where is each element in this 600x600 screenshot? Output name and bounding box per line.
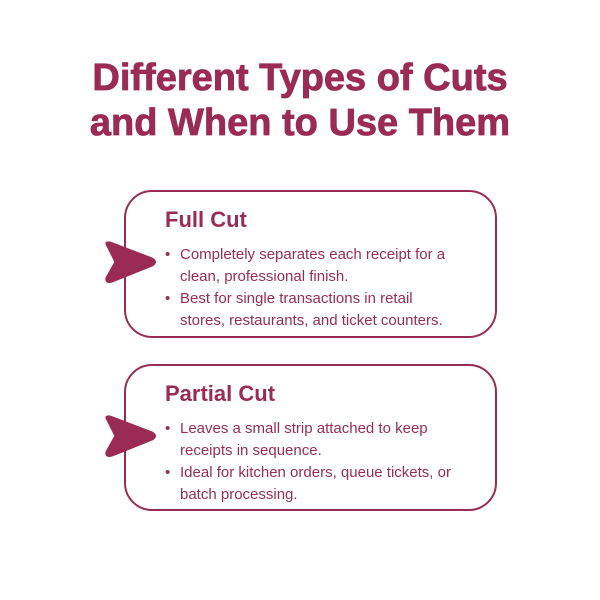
title: Different Types of Cuts [92,57,508,99]
bullet list: partial cut: Leaves a small strip attached to keep receipts in sequence. [180,420,428,459]
heading: partial cut: Partial Cut [165,381,275,406]
icon: arrow partial cut [105,415,156,457]
bullet list: partial cut: Ideal for kitchen orders, queue tickets, or batch processing. [180,464,451,503]
bullet list: full cut [166,246,446,329]
panel: full cut [124,190,497,338]
panel: partial cut [124,364,497,511]
icon: arrow full cut [105,241,156,283]
bullet list: partial cut [166,420,451,503]
bullet list: full cut: Best for single transactions in retail stores, restaurants, and ticket counters. [180,290,443,329]
heading: full cut: Full Cut [165,207,247,232]
title [90,57,510,144]
title: and When to Use Them [90,102,510,144]
bullet list: full cut: Completely separates each receipt for a clean, professional finish. [180,246,445,285]
